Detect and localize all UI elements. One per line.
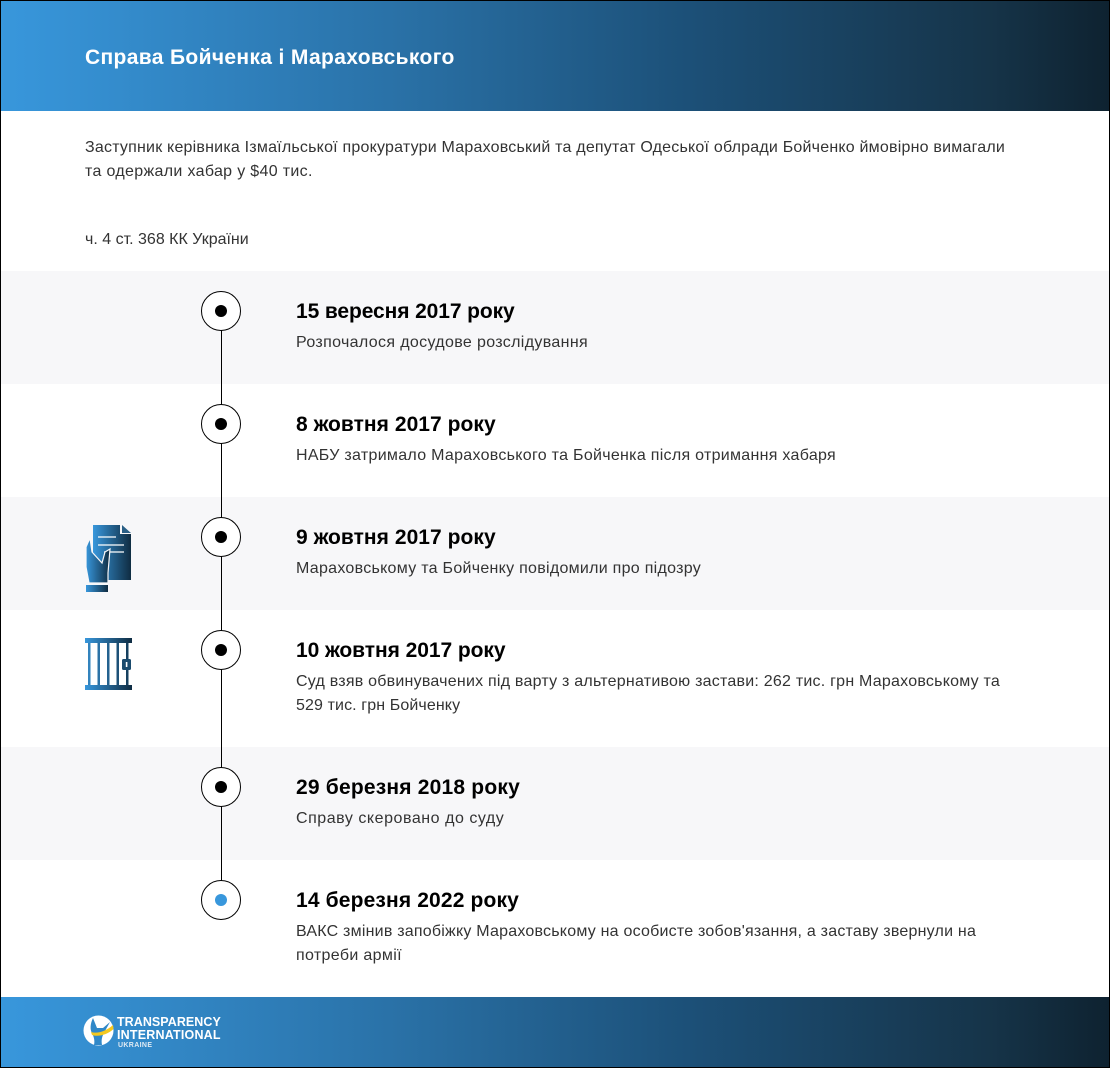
- description 3: Мараховському та Бойченку повідомили про підозру: [296, 560, 701, 577]
- date 6: 14 березня 2022 року: [296, 889, 519, 912]
- logo text: TRANSPARENCY: [117, 1015, 221, 1029]
- intro text: [85, 139, 1005, 180]
- date 3: 9 жовтня 2017 року: [296, 526, 496, 549]
- description 6: ВАКС змінив запобіжку Мараховському на особисте зобов'язання, а заставу звернули на: [296, 923, 976, 940]
- node 3: [201, 517, 241, 557]
- logo text: [117, 1015, 221, 1042]
- description 5: Справу скеровано до суду: [296, 810, 504, 827]
- node 4: [201, 630, 241, 670]
- logo emblem: [84, 1016, 114, 1046]
- description 6: потреби армії: [296, 947, 402, 964]
- timeline line: [221, 311, 222, 901]
- date 2: 8 жовтня 2017 року: [296, 413, 496, 436]
- description 1: Розпочалося досудове розслідування: [296, 334, 588, 351]
- row band 5: [0, 747, 1110, 860]
- logo subtext: UKRAINE: [118, 1042, 152, 1049]
- legal article: ч. 4 ст. 368 КК України: [85, 231, 249, 248]
- row band 1: [0, 271, 1110, 384]
- logo text: INTERNATIONAL: [117, 1028, 221, 1042]
- title: Справа Бойченка і Мараховського: [85, 46, 455, 69]
- description 4: Суд взяв обвинувачених під варту з альтернативою застави: 262 тис. грн Мараховському та: [296, 673, 1000, 690]
- intro text: та одержали хабар у $40 тис.: [85, 163, 313, 180]
- logo: Transparency International Ukraine: [84, 1015, 221, 1049]
- date 5: 29 березня 2018 року: [296, 776, 520, 799]
- description 4: [296, 673, 1000, 714]
- node 5: [201, 767, 241, 807]
- description 6: [296, 923, 976, 964]
- description 2: НАБУ затримало Мараховського та Бойченка після отримання хабаря: [296, 447, 836, 464]
- icon: prison bars: [85, 638, 132, 690]
- node 6: [201, 880, 241, 920]
- footer banner: [0, 997, 1110, 1068]
- row band 3: [0, 497, 1110, 610]
- node 1: [201, 291, 241, 331]
- node 2: [201, 404, 241, 444]
- date 4: 10 жовтня 2017 року: [296, 639, 506, 662]
- icon: hand holding document: [86, 525, 131, 592]
- date 1: 15 вересня 2017 року: [296, 300, 515, 323]
- description 4: 529 тис. грн Бойченку: [296, 697, 460, 714]
- header banner: [0, 0, 1110, 111]
- intro text: Заступник керівника Ізмаїльської прокуратури Мараховський та депутат Одеської облради Бойченко ймовірно вимагали: [85, 139, 1005, 156]
